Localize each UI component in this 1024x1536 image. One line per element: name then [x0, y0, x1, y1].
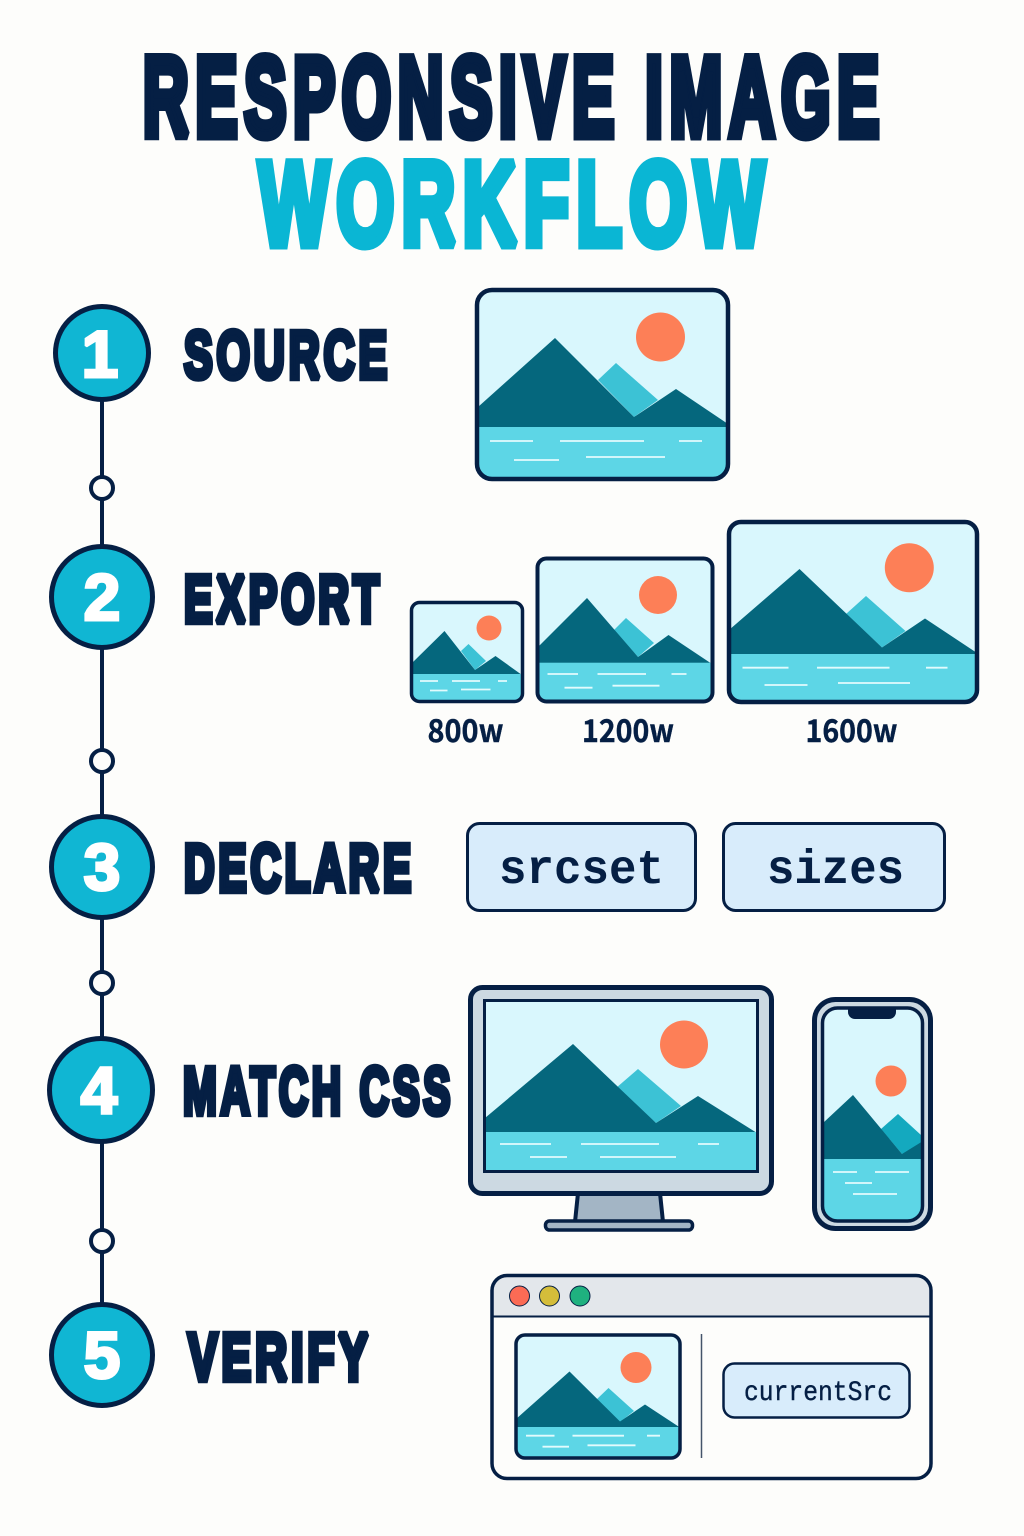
step 5 label: VERIFY [188, 1320, 372, 1395]
step 1: source [56, 290, 728, 479]
currentSrc chip: currentSrc [744, 1378, 892, 1409]
step 2: export [52, 522, 977, 751]
step 3 badge: 3 [84, 830, 120, 904]
icon: phone [814, 1000, 930, 1228]
step 2 label: EXPORT [184, 562, 383, 637]
step 1 label: SOURCE [184, 318, 391, 393]
sizes chip [724, 824, 944, 910]
export 1600w image [729, 522, 977, 702]
browser window [492, 1275, 931, 1478]
step 5 badge: 5 [84, 1318, 120, 1392]
source image [477, 290, 728, 479]
step 2 badge [52, 546, 152, 648]
export 800w image [411, 602, 523, 702]
export 1200w image [537, 558, 713, 703]
timeline connector [91, 395, 113, 1310]
step 2 badge: 2 [84, 560, 120, 634]
window control dots [510, 1286, 590, 1306]
sizes chip: sizes [767, 844, 904, 898]
size labels: 800w [428, 706, 504, 751]
srcset chip: srcset [499, 844, 664, 898]
step 4 label: MATCH CSS [183, 1054, 454, 1129]
size labels: 1600w [806, 706, 898, 751]
currentSrc chip [724, 1364, 910, 1418]
browser image [516, 1335, 680, 1458]
icon: desktop monitor [470, 988, 772, 1230]
srcset chip [468, 824, 696, 910]
step 4 badge [50, 1038, 152, 1142]
step 3 badge [52, 816, 152, 918]
step 1 badge: 1 [82, 317, 118, 391]
step 3 label: DECLARE [184, 831, 415, 906]
step 4 badge: 4 [81, 1053, 118, 1127]
step 4: match css [50, 988, 930, 1230]
step 5 badge [52, 1304, 152, 1406]
step 3: declare [52, 816, 944, 918]
title [143, 34, 886, 270]
step 5: verify [52, 1275, 931, 1478]
size labels [428, 706, 898, 751]
step 1 badge [56, 306, 148, 400]
size labels: 1200w [582, 706, 674, 751]
